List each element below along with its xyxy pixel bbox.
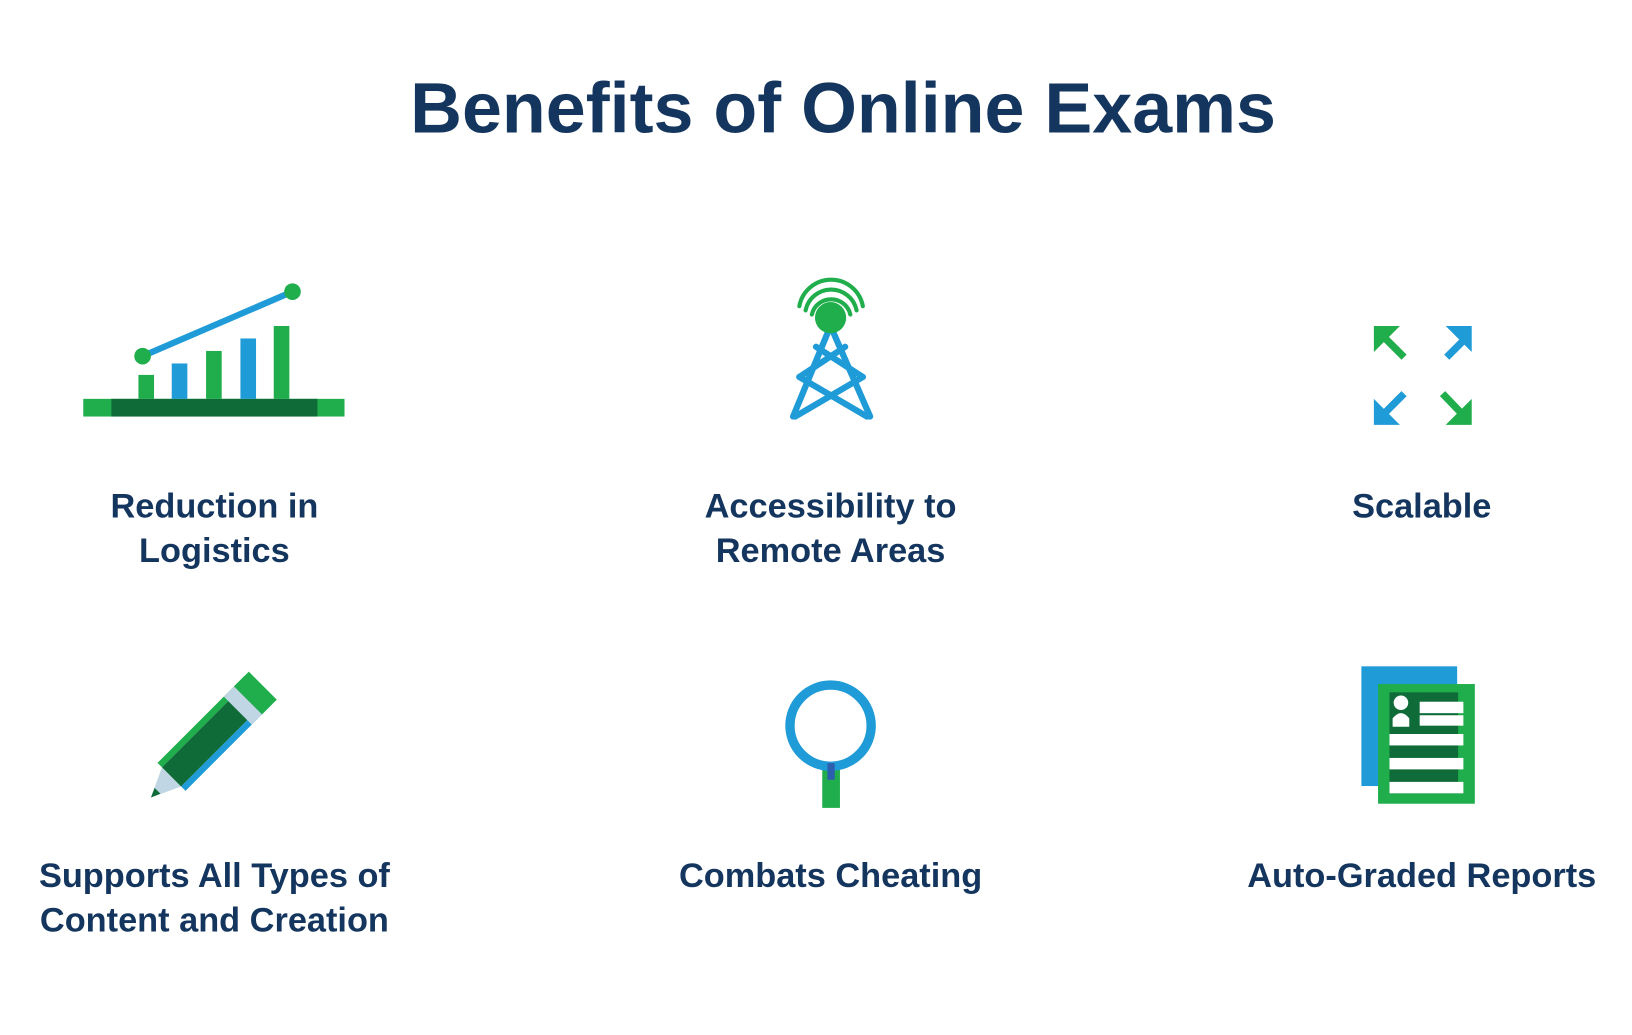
icon: bar chart (83, 283, 345, 417)
title: Benefits of Online Exams (410, 68, 1276, 148)
label: supports all types: Supports All Types of (39, 857, 390, 895)
icon: tower (793, 280, 870, 417)
label: auto-graded reports: Auto-Graded Reports (1247, 857, 1596, 895)
label: scalable: Scalable (1352, 487, 1491, 525)
label: combats cheating: Combats Cheating (679, 857, 982, 895)
label: reduction in logistics: Logistics (139, 532, 290, 570)
label: reduction in logistics: Reduction in (110, 487, 318, 526)
icon: report document (1361, 666, 1475, 804)
icon: pencil (137, 672, 277, 811)
label: accessibility: Accessibility to (705, 487, 956, 526)
label: accessibility: Remote Areas (716, 532, 945, 570)
icon: magnifier (790, 685, 871, 808)
icon: scalable arrows (1374, 326, 1472, 425)
label: supports all types: Content and Creation (40, 902, 389, 940)
